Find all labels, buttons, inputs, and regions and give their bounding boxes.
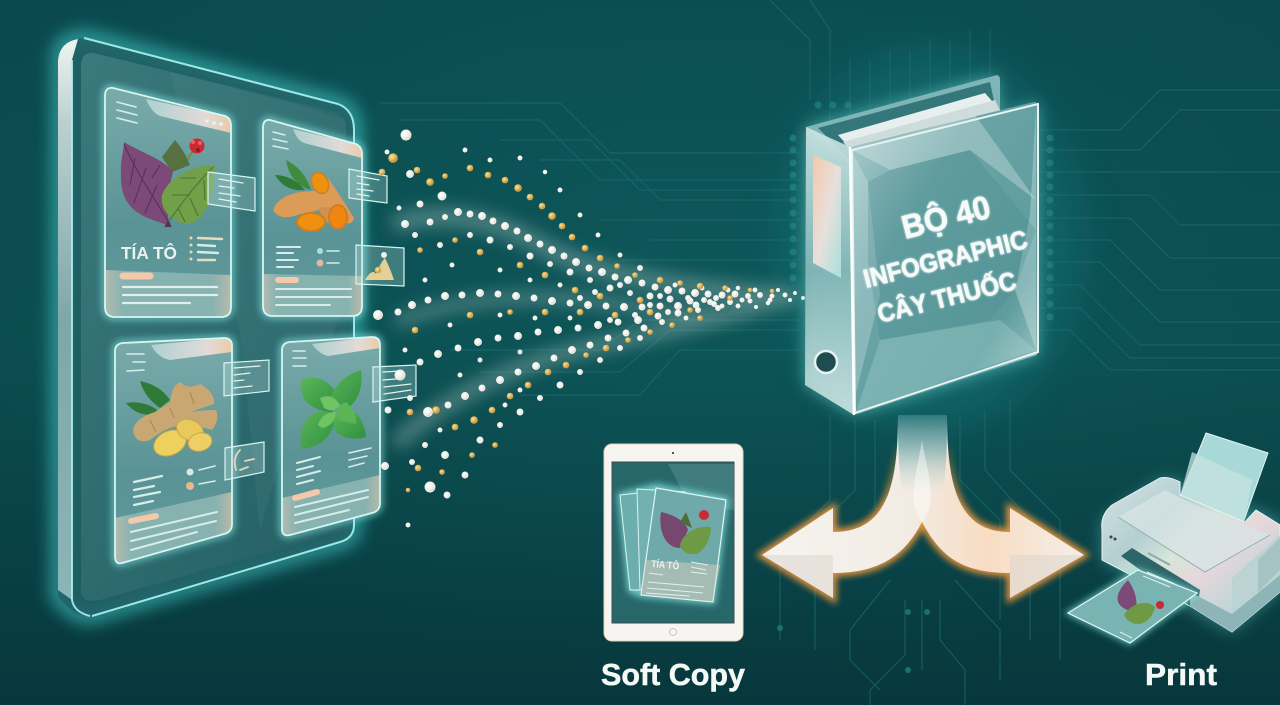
menu and detail lines <box>273 132 351 305</box>
binder title: BỘ 40 <box>898 187 994 246</box>
menu and detail lines <box>127 354 217 550</box>
paper in tray <box>1180 433 1268 523</box>
card: turmeric <box>263 120 362 316</box>
binder title: INFOGRAPHIC <box>860 224 1031 294</box>
illustration: ginger root <box>126 381 217 461</box>
menu lines and window dots <box>117 102 222 126</box>
illustration: turmeric root <box>273 160 354 231</box>
plant name: TÍA TÔ <box>121 242 177 263</box>
menu and detail lines <box>293 351 371 523</box>
screen card name: TÍA TÔ <box>651 557 680 572</box>
detail lines <box>123 238 222 303</box>
legend dots <box>186 468 194 490</box>
particle stream mist <box>400 217 790 440</box>
floating mini panels <box>208 169 416 480</box>
label: Print: Print <box>1145 657 1217 692</box>
legend dots <box>316 248 324 266</box>
card: mint <box>282 337 380 535</box>
particle stream: gold <box>375 154 774 492</box>
circuit node dots <box>777 102 1054 673</box>
card: ginger <box>115 338 232 563</box>
printed sheet with leaf <box>1068 570 1197 643</box>
card: Tía Tô <box>105 88 231 317</box>
tablet bright left edge <box>58 39 78 600</box>
particle stream: pearls <box>374 130 804 527</box>
card glow halos <box>105 88 380 563</box>
printer <box>1068 433 1280 643</box>
binder back cover and pages <box>805 75 1038 415</box>
circuit board lines <box>380 0 1280 705</box>
binder front cover <box>850 102 1038 415</box>
tablet device: soft copy <box>604 444 743 641</box>
stacked cards on screen <box>620 486 726 602</box>
illustration: mint leaves <box>300 370 366 449</box>
binder title <box>860 187 1031 329</box>
binder title: CÂY THUỐC <box>874 265 1019 329</box>
illustration: perilla leaves <box>121 138 215 226</box>
label: Soft Copy: Soft Copy <box>601 657 746 692</box>
binder spine <box>805 127 854 415</box>
split arrow <box>762 415 1084 598</box>
glass tablet panel <box>58 38 354 616</box>
mini perilla leaves <box>660 510 711 554</box>
